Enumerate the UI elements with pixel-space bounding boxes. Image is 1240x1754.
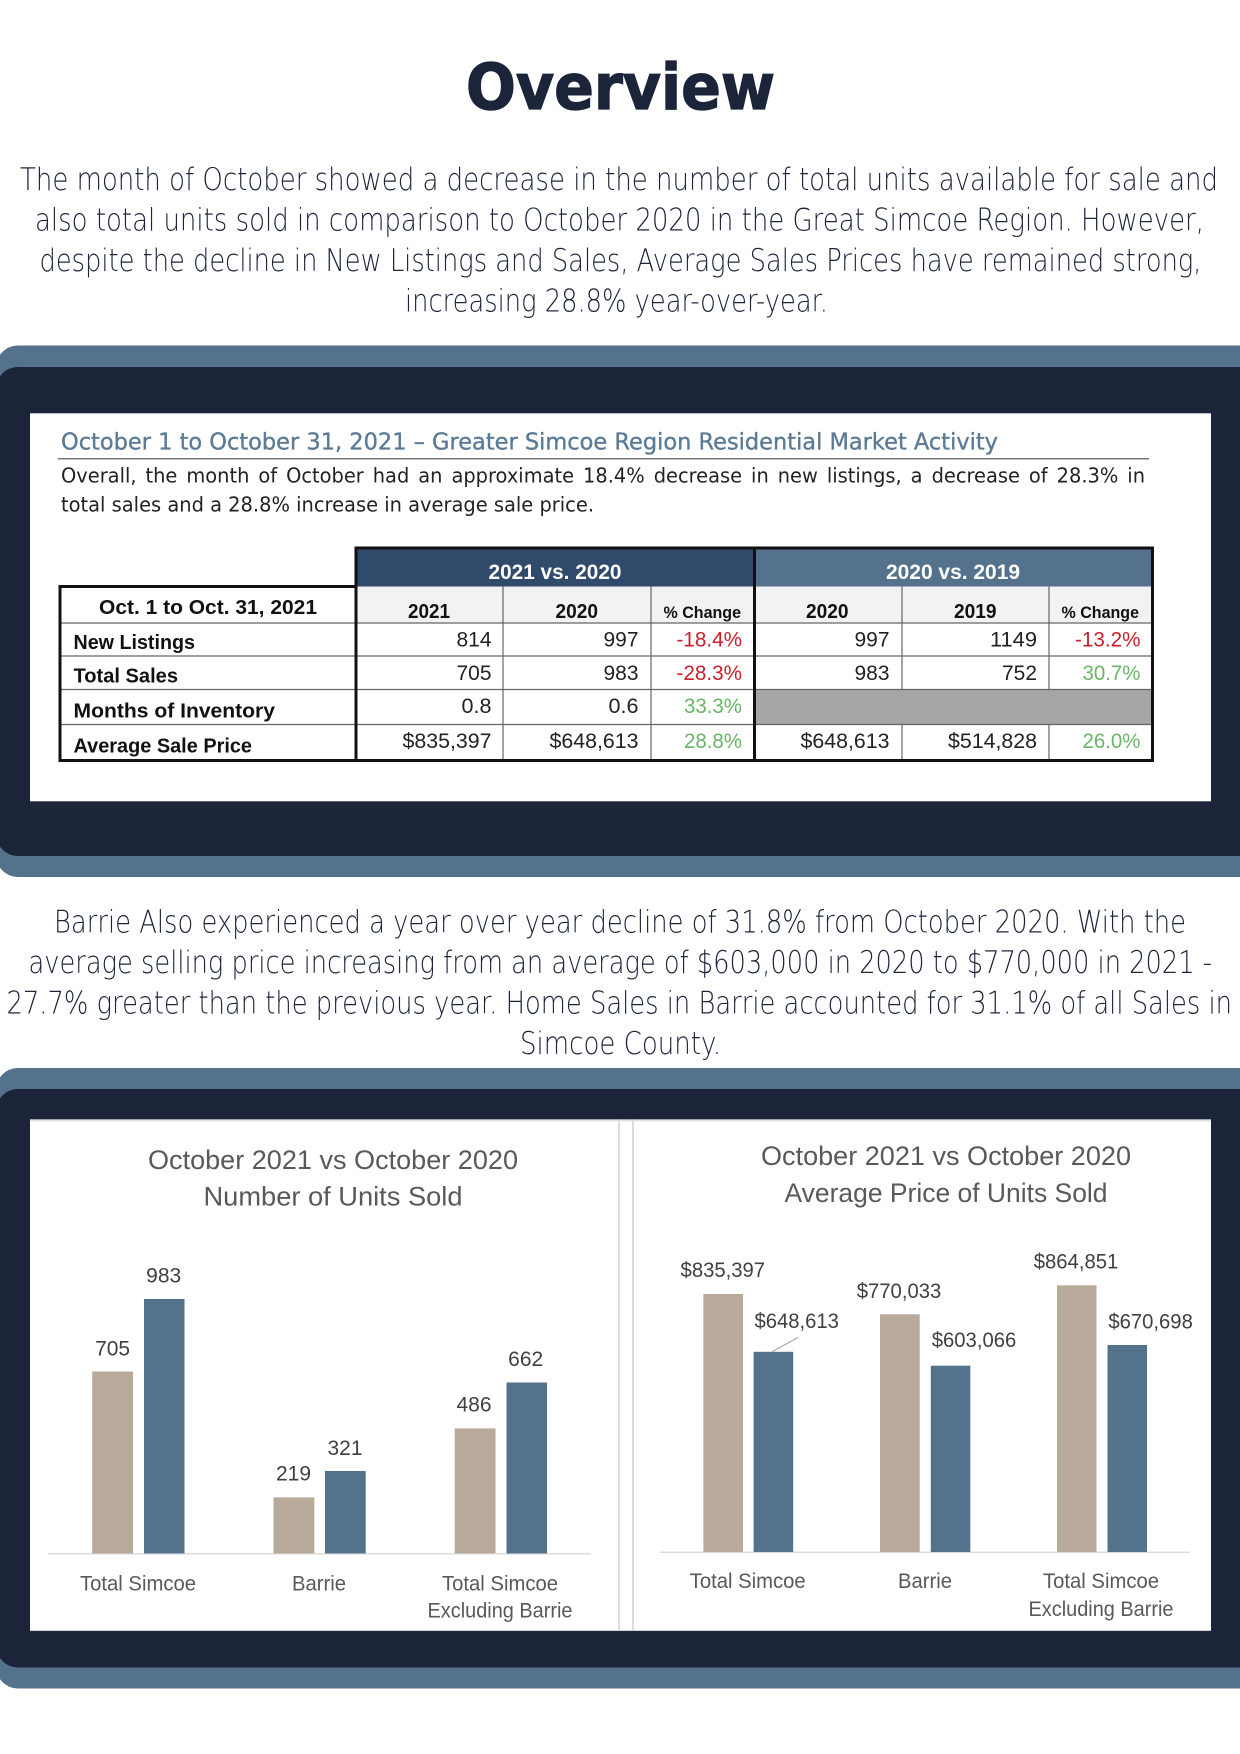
table column headers: 2020 <box>806 601 848 623</box>
table row: New Listings: 997 <box>854 628 890 652</box>
category labels: price chart: Barrie <box>898 1570 952 1593</box>
table column headers: 2020 <box>556 601 598 623</box>
table column headers: 2020 vs. 2019 <box>886 561 1020 584</box>
category labels: price chart <box>690 1570 1174 1621</box>
table row: New Listings: 814 <box>456 628 492 652</box>
panel: charts <box>0 1068 1240 1688</box>
bars: Total Simcoe price: $835,397 <box>681 1259 765 1282</box>
text block: Barrie paragraph: Simcoe County. <box>520 1026 721 1062</box>
bars: Total Simcoe units <box>92 1264 184 1554</box>
table row: Total Sales <box>74 662 1140 688</box>
table row: Months of Inventory: 0.6 <box>608 695 638 718</box>
table row: Total Sales: 30.7% <box>1082 662 1140 685</box>
category labels: units chart: Barrie <box>292 1572 346 1596</box>
bars: Barrie units: 219 <box>276 1462 311 1486</box>
bars: Excluding Barrie units: 662 <box>508 1348 543 1371</box>
table row: New Listings <box>74 628 1140 654</box>
table row: Total Sales: 983 <box>604 662 638 685</box>
bars: Total Simcoe price: $648,613 <box>754 1310 839 1333</box>
table row: Total Sales: Total Sales <box>74 666 178 688</box>
table row: Months of Inventory: 33.3% <box>684 695 742 718</box>
table row: New Listings: -13.2% <box>1075 628 1140 652</box>
bars: Barrie price: $603,066 <box>932 1329 1016 1352</box>
table row: Months of Inventory <box>74 695 742 722</box>
table row: Average Sale Price: 26.0% <box>1082 730 1140 753</box>
chart title: average price <box>761 1141 1131 1208</box>
table row: Months of Inventory: Months of Inventory <box>74 700 276 722</box>
table row: Average Sale Price: $514,828 <box>948 730 1037 753</box>
table row: Average Sale Price: Average Sale Price <box>74 736 252 758</box>
chart title: units sold: Number of Units Sold <box>204 1182 462 1212</box>
table row: New Listings: 1149 <box>990 628 1037 652</box>
table row: Months of Inventory: 0.8 <box>462 695 492 718</box>
bars: Total Simcoe price <box>681 1259 839 1552</box>
panel summary text <box>61 464 1145 517</box>
bar chart: average price of units sold <box>660 1141 1193 1621</box>
table column headers <box>99 561 1139 623</box>
bars: Excluding Barrie price: $670,698 <box>1108 1310 1193 1334</box>
table row: Average Sale Price <box>74 730 1140 758</box>
table column headers: % Change <box>664 603 741 622</box>
category labels: price chart: Total Simcoe <box>690 1570 806 1593</box>
chart title: units sold: October 2021 vs October 2020 <box>148 1145 518 1175</box>
bar chart: number of units sold <box>48 1145 591 1622</box>
table row: New Listings: 997 <box>604 628 638 652</box>
text block: intro paragraph <box>20 162 1218 320</box>
table row: Total Sales: 752 <box>1002 662 1037 685</box>
title: Overview <box>466 51 775 124</box>
chart title: average price: Average Price of Units Sold <box>784 1178 1108 1208</box>
table row: New Listings: New Listings <box>74 632 195 654</box>
table <box>60 548 1152 760</box>
bars: Total Simcoe units: 705 <box>95 1338 130 1360</box>
table row: Total Sales: 705 <box>456 662 492 685</box>
chart title: average price: October 2021 vs October 2020 <box>761 1141 1131 1171</box>
bars: Excluding Barrie price <box>1034 1250 1193 1552</box>
bars: Barrie units: 321 <box>327 1437 363 1460</box>
text block: Barrie paragraph <box>6 904 1232 1062</box>
table column headers: 2021 <box>408 601 450 623</box>
panel heading: October 1 to October 31, 2021 – Greater Simcoe Region Residential Market Activity <box>61 429 998 455</box>
table row: New Listings: -18.4% <box>676 628 742 652</box>
bars: Excluding Barrie units <box>455 1348 547 1554</box>
category labels: units chart: Excluding Barrie <box>428 1600 572 1622</box>
category labels: units chart: Total Simcoe <box>442 1572 558 1596</box>
text block: intro paragraph: increasing 28.8% year-over-year. <box>405 284 828 320</box>
table row: Total Sales: -28.3% <box>676 662 742 685</box>
bars: Excluding Barrie price: $864,851 <box>1034 1250 1118 1273</box>
panel: market activity table <box>0 346 1240 877</box>
category labels: units chart: Total Simcoe <box>80 1572 196 1596</box>
table column headers: 2019 <box>954 601 996 623</box>
category labels: price chart: Excluding Barrie <box>1028 1598 1174 1621</box>
table row: Average Sale Price: $648,613 <box>800 730 890 753</box>
panel summary text: Overall, the month of October had an approximate 18.4% decrease in new listings, a decrease of 28.3% in <box>61 464 1145 488</box>
table row: Average Sale Price: $648,613 <box>550 730 638 753</box>
bars: Total Simcoe units: 983 <box>146 1264 181 1288</box>
chart title: units sold <box>148 1145 518 1212</box>
table column headers: % Change <box>1062 603 1139 622</box>
bars: Barrie price <box>857 1280 1016 1552</box>
category labels: price chart: Total Simcoe <box>1043 1570 1159 1593</box>
bars: Barrie units <box>274 1437 366 1554</box>
table row: Total Sales: 983 <box>854 662 890 685</box>
category labels: units chart <box>80 1572 572 1622</box>
table column headers: Oct. 1 to Oct. 31, 2021 <box>99 597 317 619</box>
panel summary text: total sales and a 28.8% increase in average sale price. <box>61 493 594 517</box>
table column headers: 2021 vs. 2020 <box>488 561 622 584</box>
table row: Average Sale Price: 28.8% <box>684 730 742 753</box>
bars: Excluding Barrie units: 486 <box>456 1394 492 1416</box>
bars: Barrie price: $770,033 <box>857 1280 941 1303</box>
table row: Average Sale Price: $835,397 <box>402 730 492 753</box>
